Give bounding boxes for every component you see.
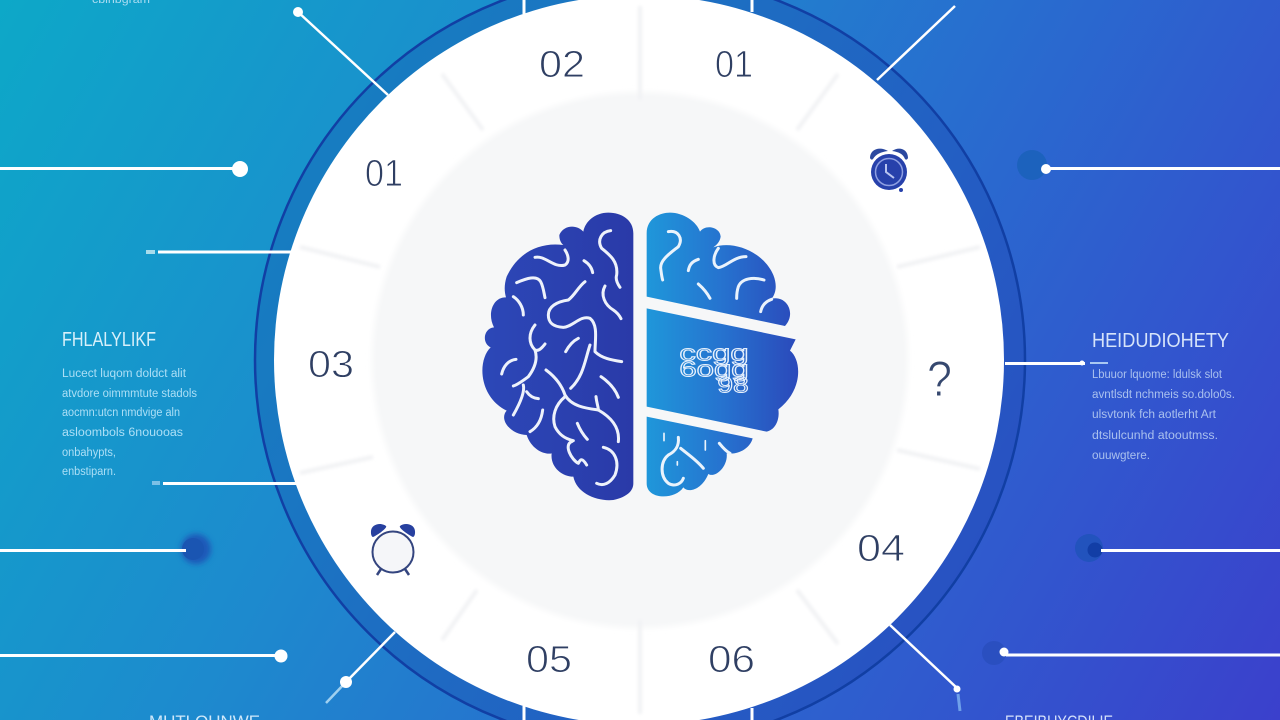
tick marks at the disc edges bbox=[524, 0, 752, 720]
line: left 2 bbox=[146, 250, 293, 254]
left body text: atvdore oimmmtute stadols bbox=[62, 388, 197, 400]
left heading: FHLALYLIKF bbox=[62, 329, 156, 351]
inner disc bbox=[372, 92, 908, 628]
segment separators bbox=[300, 6, 980, 714]
right body text: ouuwgtere. bbox=[1092, 450, 1150, 462]
right heading: HEIDUDIOHETY bbox=[1092, 330, 1229, 352]
line: lower right diagonal bbox=[890, 625, 960, 711]
left body text: onbahypts, bbox=[62, 447, 116, 459]
line: left 1 bbox=[0, 161, 248, 177]
right body text bbox=[1092, 369, 1235, 462]
glyph row 1: ccgg bbox=[679, 341, 749, 366]
line: right 3 with dark marker bbox=[1075, 534, 1280, 562]
line: left 3 bbox=[152, 481, 298, 485]
number 04 right: 04 bbox=[857, 528, 905, 570]
glyph row 2: 6ogg bbox=[679, 357, 749, 382]
outer ring bbox=[255, 0, 1025, 720]
text panel: right bbox=[1092, 330, 1235, 462]
number 01 top: 01 bbox=[715, 44, 753, 86]
line: right 2 bbox=[1005, 360, 1108, 366]
central white disc bbox=[274, 0, 1004, 720]
segment numbers bbox=[308, 44, 952, 681]
number 02 top: 02 bbox=[539, 44, 585, 86]
left body text: aocmn:utcn nmdvige aln bbox=[62, 407, 180, 419]
right body text: avntlsdt nchmeis so.dolo0s. bbox=[1092, 389, 1235, 401]
brain illustration bbox=[482, 213, 798, 500]
line: lower left diagonal bbox=[326, 632, 395, 703]
line: upper right diagonal bbox=[877, 6, 955, 80]
number 06 bottom: 06 bbox=[708, 639, 755, 681]
brain right hemisphere bbox=[647, 213, 798, 496]
right body text: dtslulcunhd atooutmss. bbox=[1092, 430, 1218, 442]
question mark right: ? bbox=[927, 351, 952, 407]
brain left hemisphere bbox=[482, 213, 633, 500]
text panel: left bbox=[62, 329, 197, 478]
left body text bbox=[62, 368, 197, 478]
line: right 4 with dark marker bbox=[982, 641, 1280, 665]
glyph row 3: 98 bbox=[717, 373, 749, 398]
icon: filled alarm clock bbox=[870, 149, 908, 192]
right body text: Lbuuor lquome: ldulsk slot bbox=[1092, 369, 1223, 381]
left body text: Lucect luqom doldct alit bbox=[62, 368, 187, 380]
left body text: asloombols 6nouooas bbox=[62, 427, 183, 439]
brain left folds bbox=[502, 231, 622, 485]
line: right 1 with dark marker bbox=[1017, 150, 1280, 180]
line: upper left diagonal bbox=[293, 7, 388, 95]
line: left 5 bbox=[0, 650, 288, 662]
brain right folds bbox=[661, 231, 772, 485]
brain centre glyphs bbox=[679, 341, 749, 398]
line: left 4 with dark marker bbox=[0, 534, 211, 564]
right body text: ulsvtonk fch aotlerht Art bbox=[1092, 409, 1217, 421]
left body text: enbstiparn. bbox=[62, 466, 116, 478]
icon: outline alarm clock bbox=[371, 524, 415, 575]
number 03 left: 03 bbox=[308, 344, 354, 386]
number 01 left: 01 bbox=[365, 153, 403, 195]
number 05 bottom: 05 bbox=[526, 639, 572, 681]
